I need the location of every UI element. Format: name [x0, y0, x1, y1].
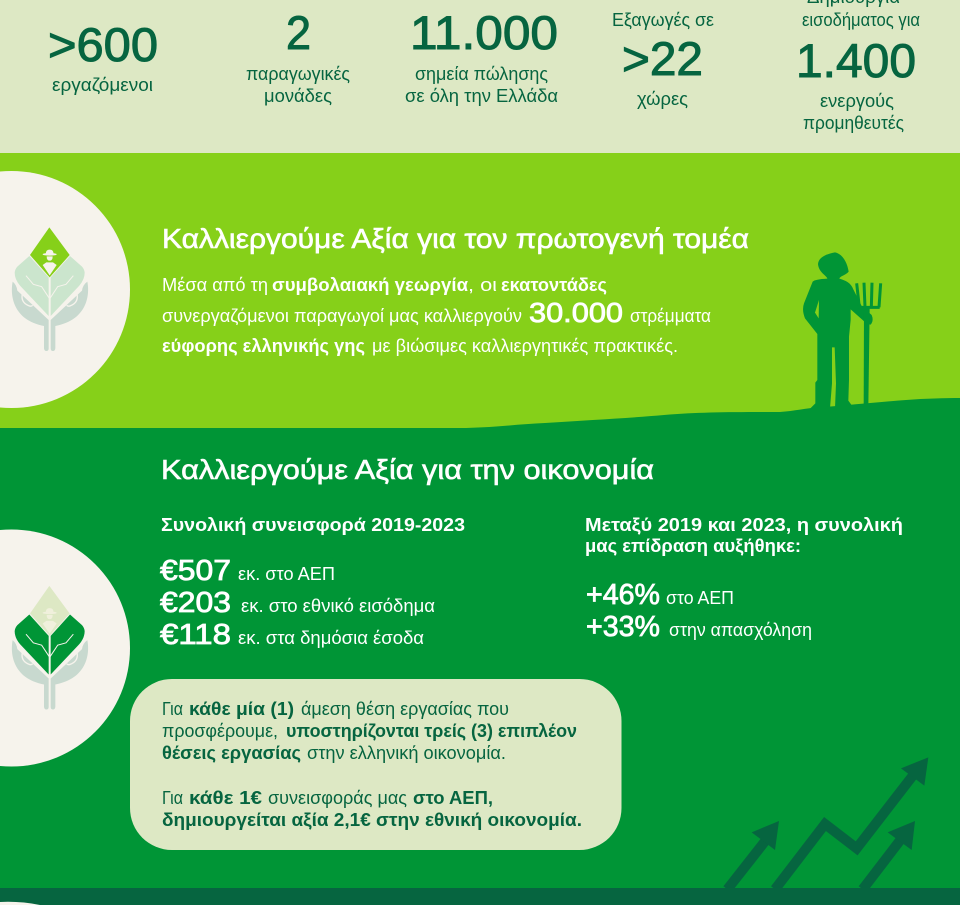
stat: exports: χώρες: [637, 88, 688, 109]
text block: contract farming: στρέμματα: [630, 305, 711, 326]
subheading: impact growth: Μεταξύ 2019 και 2023, η συνολική: [585, 514, 903, 536]
stat: exports: Εξαγωγές σε: [612, 9, 714, 30]
stat: production units: 2: [286, 6, 311, 59]
subheading: total contribution: Συνολική συνεισφορά 2019-2023: [161, 514, 465, 535]
stat: points of sale: 11.000: [410, 6, 558, 59]
stat: production units: [246, 6, 350, 106]
stat: suppliers: 1.400: [796, 34, 916, 87]
text block: contract farming: συνεργαζόμενοι παραγωγοί μας καλλιεργούν: [162, 305, 522, 326]
panel: key figures: [0, 0, 960, 153]
text block: contract farming: συμβολαιακή γεωργία: [272, 274, 469, 295]
stat: exports: [612, 9, 714, 109]
callout: job and GDP multipliers: κάθε μία (1): [189, 698, 294, 719]
list: growth figures: +33%: [586, 611, 660, 643]
stat: suppliers: εισοδήματος για: [802, 9, 920, 30]
text block: contract farming: με βιώσιμες καλλιεργητικές πρακτικές.: [372, 335, 678, 356]
text block: contract farming: [162, 274, 711, 356]
list: contribution figures: εκ. στο εθνικό εισόδημα: [241, 595, 435, 616]
text block: contract farming: , οι: [468, 274, 497, 295]
stat: employees: εργαζόμενοι: [52, 74, 153, 95]
callout: job and GDP multipliers: συνεισφοράς μας: [268, 787, 407, 808]
list: contribution figures: εκ. στα δημόσια έσοδα: [238, 627, 424, 648]
callout: job and GDP multipliers: άμεση θέση εργασίας που: [301, 698, 509, 719]
icon: circle with leaf, hands and farmer: [0, 171, 130, 408]
heading: economy: Καλλιεργούμε Αξία για την οικονομία: [161, 454, 654, 485]
list: contribution figures: €118: [160, 619, 231, 651]
stat: employees: >600: [48, 18, 158, 71]
subheading: impact growth: [585, 514, 903, 557]
callout: job and GDP multipliers: δημιουργείται αξία 2,1€ στην εθνική οικονομία.: [162, 809, 582, 831]
stat: suppliers: [796, 0, 920, 133]
stat: production units: μονάδες: [264, 85, 332, 106]
icon: farmer silhouette with pitchfork: [803, 252, 881, 409]
list: growth figures: +46%: [586, 579, 660, 611]
callout: job and GDP multipliers: στο ΑΕΠ,: [413, 787, 493, 808]
callout: job and GDP multipliers: θέσεις εργασίας: [162, 742, 301, 763]
callout: job and GDP multipliers: Για: [162, 698, 183, 719]
stat: points of sale: σε όλη την Ελλάδα: [405, 85, 558, 106]
callout: job and GDP multipliers: [130, 679, 622, 850]
callout: job and GDP multipliers: στην ελληνική οικονομία.: [307, 742, 506, 763]
panel: primary sector: [0, 153, 960, 433]
icon: next section circle: [0, 902, 40, 905]
panel: economy: [0, 398, 960, 889]
list: contribution figures: [160, 555, 435, 651]
list: contribution figures: εκ. στο ΑΕΠ: [238, 563, 335, 584]
icon: circle with highlighted leaf: [0, 530, 130, 766]
list: growth figures: στην απασχόληση: [669, 619, 812, 640]
text block: contract farming: εύφορης ελληνικής γης: [162, 335, 365, 356]
list: growth figures: [586, 579, 812, 643]
list: growth figures: στο ΑΕΠ: [666, 587, 734, 608]
icon: rising arrows: [727, 757, 928, 889]
stat: suppliers: ενεργούς: [820, 90, 894, 111]
callout: job and GDP multipliers: προσφέρουμε,: [162, 720, 278, 741]
list: contribution figures: €507: [160, 555, 231, 587]
callout: job and GDP multipliers: υποστηρίζονται τρείς (3) επιπλέον: [286, 720, 577, 742]
text block: contract farming: Μέσα από τη: [162, 274, 268, 295]
panel: next section band: [0, 888, 960, 905]
stat: exports: >22: [622, 32, 703, 85]
subheading: impact growth: μας επίδραση αυξήθηκε:: [585, 535, 801, 557]
callout: job and GDP multipliers: Για: [162, 787, 183, 808]
text block: contract farming: 30.000: [529, 297, 623, 328]
text block: contract farming: εκατοντάδες: [501, 274, 607, 295]
list: contribution figures: €203: [160, 587, 231, 619]
callout: job and GDP multipliers: κάθε 1€: [189, 787, 262, 808]
stat: suppliers: προμηθευτές: [803, 112, 904, 133]
stat: points of sale: [405, 6, 558, 106]
stat: points of sale: σημεία πώλησης: [415, 63, 548, 84]
stat: employees: [48, 18, 158, 95]
stat: production units: παραγωγικές: [246, 63, 350, 84]
heading: primary sector: Καλλιεργούμε Αξία για τον πρωτογενή τομέα: [162, 223, 749, 254]
